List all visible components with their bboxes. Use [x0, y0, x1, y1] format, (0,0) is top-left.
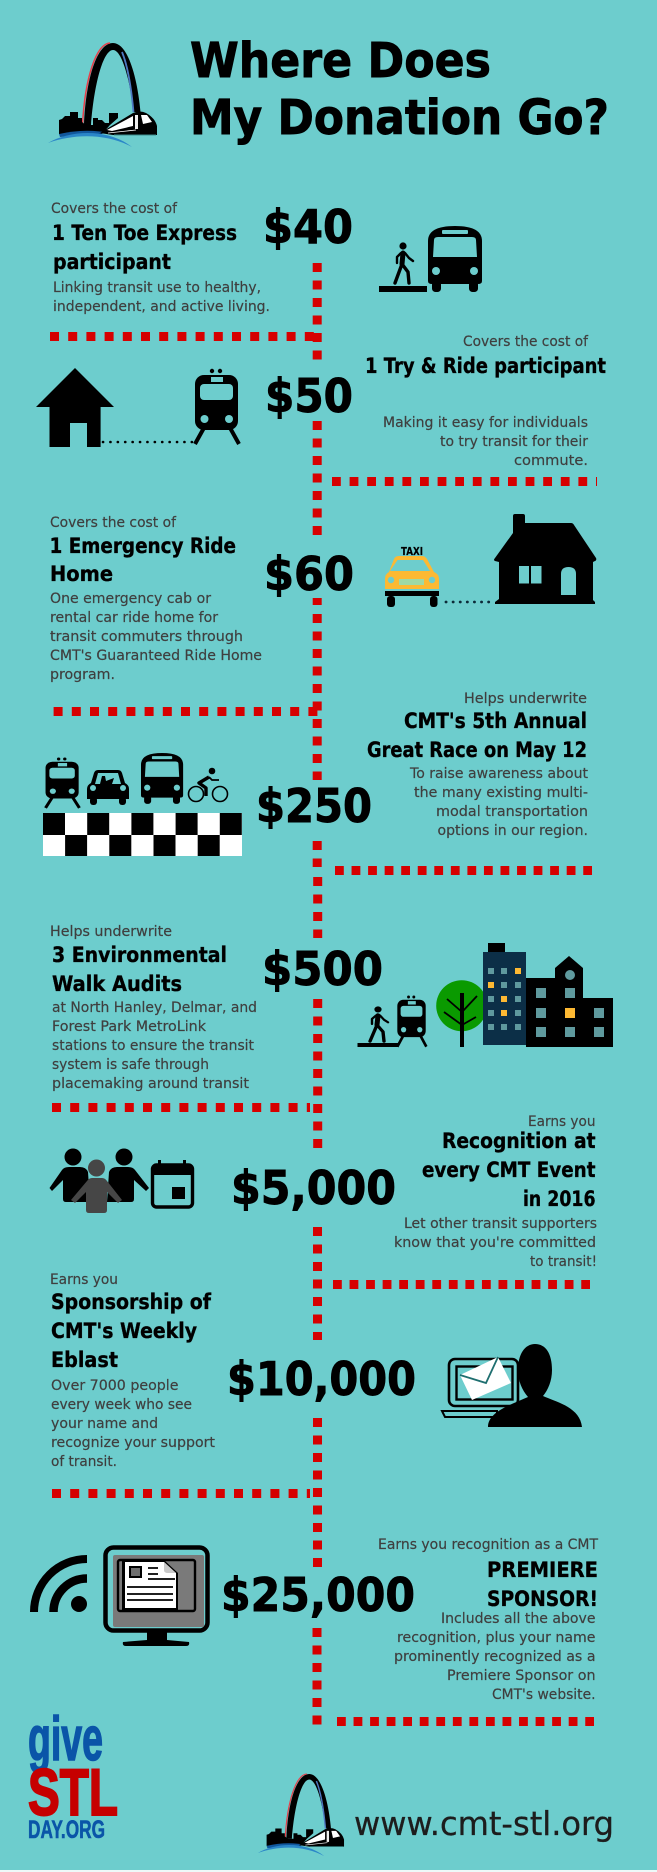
text: Try and Ride: Covers the cost of: [463, 334, 589, 350]
divider: $5,000: [333, 1280, 590, 1289]
text: Sponsorship of Weekly Eblast: recognize your support: [51, 1435, 216, 1451]
connector dots: [446, 601, 490, 603]
amount: $5,000: $5,000: [231, 1161, 396, 1215]
text: Try and Ride: [365, 334, 606, 469]
text: Sponsorship of Weekly Eblast: Eblast: [51, 1348, 118, 1372]
text: Recognition at every CMT Event: [394, 1114, 597, 1270]
text: Premiere Sponsor: prominently recognized as a: [394, 1649, 596, 1665]
website address: www.cmt-stl.org: [354, 1804, 614, 1843]
icon: monitor with document: [106, 1548, 208, 1646]
text: Great Race: To raise awareness about: [409, 766, 589, 782]
panel: $25,000 tier: [34, 1537, 598, 1722]
panel: $10,000 tier: [50, 1272, 582, 1494]
panel: $50 tier: [36, 334, 606, 482]
text: Recognition at every CMT Event: to transit!: [530, 1254, 597, 1270]
text: Recognition at every CMT Event: in 2016: [523, 1187, 596, 1211]
text: Ten Toe Express: Covers the cost of: [51, 201, 178, 217]
text: Environmental Walk Audits: system is safe through: [52, 1057, 209, 1073]
text: Premiere Sponsor: SPONSOR!: [487, 1587, 598, 1611]
divider: $500: [52, 1103, 310, 1112]
text: Try and Ride: 1 Try & Ride participant: [365, 354, 606, 378]
text: Sponsorship of Weekly Eblast: every week who see: [51, 1397, 192, 1413]
text: Emergency Ride Home: rental car ride home for: [50, 610, 218, 626]
icon: taxi: [385, 546, 439, 607]
text: Emergency Ride Home: One emergency cab or: [50, 591, 211, 607]
text: Premiere Sponsor: Premiere Sponsor on: [447, 1668, 596, 1684]
text: Great Race: Great Race on May 12: [367, 738, 587, 762]
text: Environmental Walk Audits: Helps underwrite: [50, 924, 172, 940]
amount: $40: $40: [263, 200, 353, 254]
text: Environmental Walk Audits: [50, 924, 257, 1092]
panel: $40 tier: [50, 200, 482, 336]
vertical dotted timeline: [312, 263, 322, 1725]
icon: transit modes: [46, 753, 227, 808]
divider: $10,000: [52, 1489, 310, 1498]
icon: calendar: [152, 1160, 192, 1207]
icon: taxi: TAXI: [401, 546, 423, 558]
icon: house: [494, 514, 596, 604]
text: Environmental Walk Audits: stations to ensure the transit: [52, 1038, 255, 1054]
logo: give STL day: give: [28, 1705, 103, 1774]
icon: wifi: [34, 1559, 87, 1612]
text: Sponsorship of Weekly Eblast: of transit.: [51, 1454, 117, 1470]
text: Emergency Ride Home: Home: [50, 562, 113, 586]
text: Emergency Ride Home: program.: [50, 667, 115, 683]
panel: $60 tier: [50, 514, 596, 712]
text: Premiere Sponsor: CMT's website.: [492, 1687, 596, 1703]
text: Recognition at every CMT Event: Let other transit supporters: [404, 1216, 597, 1232]
text: Premiere Sponsor: [378, 1537, 598, 1703]
text: Sponsorship of Weekly Eblast: Earns you: [50, 1272, 118, 1288]
title: [190, 33, 609, 146]
text: Sponsorship of Weekly Eblast: CMT's Weekly: [51, 1319, 197, 1343]
text: Recognition at every CMT Event: know that you're committed: [394, 1235, 596, 1251]
logo: give STL day: STL: [28, 1755, 118, 1829]
text: Environmental Walk Audits: Walk Audits: [52, 972, 182, 996]
divider: $250: [335, 866, 592, 875]
text: Environmental Walk Audits: 3 Environmental: [52, 943, 227, 967]
logo: give STL day: DAY.ORG: [28, 1816, 105, 1844]
logo: CMT arch footer: [258, 1774, 344, 1856]
text: Great Race: the many existing multi-: [414, 785, 588, 801]
text: Ten Toe Express: Linking transit use to healthy,: [53, 280, 261, 296]
text: Great Race: [367, 691, 589, 839]
title: Where Does: [190, 33, 491, 89]
text: Recognition at every CMT Event: Earns you: [528, 1114, 596, 1130]
text: Emergency Ride Home: transit commuters through: [50, 629, 243, 645]
icon: pedestrian and bus: [379, 226, 482, 292]
text: Environmental Walk Audits: placemaking around transit: [52, 1076, 250, 1092]
text: Sponsorship of Weekly Eblast: Sponsorship of: [51, 1290, 212, 1314]
panel: $500 tier: [50, 924, 613, 1108]
amount: $25,000: $25,000: [221, 1568, 415, 1622]
text: Environmental Walk Audits: Forest Park MetroLink: [52, 1019, 207, 1035]
text: Great Race: modal transportation: [436, 804, 588, 820]
divider: $60: [54, 707, 318, 716]
text: Emergency Ride Home: [50, 515, 262, 683]
text: Ten Toe Express: [51, 201, 270, 315]
text: Emergency Ride Home: 1 Emergency Ride: [50, 534, 236, 558]
icon: people group: [50, 1148, 149, 1213]
text: Try and Ride: to try transit for their: [440, 434, 588, 450]
amount: $500: $500: [262, 942, 383, 996]
text: Sponsorship of Weekly Eblast: [50, 1272, 216, 1470]
divider: $50: [332, 477, 597, 486]
divider: $25,000: [337, 1717, 594, 1726]
amount: $250: $250: [256, 779, 372, 833]
icon: pedestrian, train, tree and city: [358, 943, 613, 1047]
checkered finish band: [43, 813, 242, 856]
text: Emergency Ride Home: CMT's Guaranteed Ride Home: [50, 648, 262, 664]
text: Emergency Ride Home: Covers the cost of: [50, 515, 177, 531]
text: Ten Toe Express: participant: [53, 250, 171, 274]
text: Recognition at every CMT Event: Recognition at: [442, 1129, 596, 1153]
text: Try and Ride: Making it easy for individuals: [383, 415, 588, 431]
text: Sponsorship of Weekly Eblast: your name and: [51, 1416, 158, 1432]
text: Premiere Sponsor: Earns you recognition as a CMT: [378, 1537, 598, 1553]
amount: $50: $50: [265, 369, 353, 423]
title: My Donation Go?: [190, 90, 609, 146]
text: Premiere Sponsor: recognition, plus your name: [397, 1630, 596, 1646]
amount: $10,000: $10,000: [227, 1352, 416, 1406]
icon: house to train: [36, 368, 239, 447]
text: Recognition at every CMT Event: every CMT Event: [422, 1158, 596, 1182]
logo: CMT arch and train: [48, 43, 157, 147]
text: Try and Ride: commute.: [514, 453, 588, 469]
text: Ten Toe Express: independent, and active living.: [53, 299, 270, 315]
text: Great Race: Helps underwrite: [464, 691, 587, 707]
logo: give STL day: [28, 1705, 118, 1844]
panel: $5,000 tier: [50, 1114, 597, 1284]
divider: $40: [50, 332, 314, 341]
text: Premiere Sponsor: PREMIERE: [487, 1558, 598, 1582]
text: Great Race: options in our region.: [438, 823, 588, 839]
amount: $60: $60: [264, 547, 354, 601]
text: Great Race: CMT's 5th Annual: [404, 709, 587, 733]
panel: $250 tier: [43, 691, 592, 870]
text: Sponsorship of Weekly Eblast: Over 7000 people: [51, 1378, 178, 1394]
text: Premiere Sponsor: Includes all the above: [441, 1611, 596, 1627]
text: Ten Toe Express: 1 Ten Toe Express: [52, 221, 237, 245]
text: Environmental Walk Audits: at North Hanley, Delmar, and: [52, 1000, 257, 1016]
icon: laptop, envelope and person: [442, 1344, 582, 1427]
